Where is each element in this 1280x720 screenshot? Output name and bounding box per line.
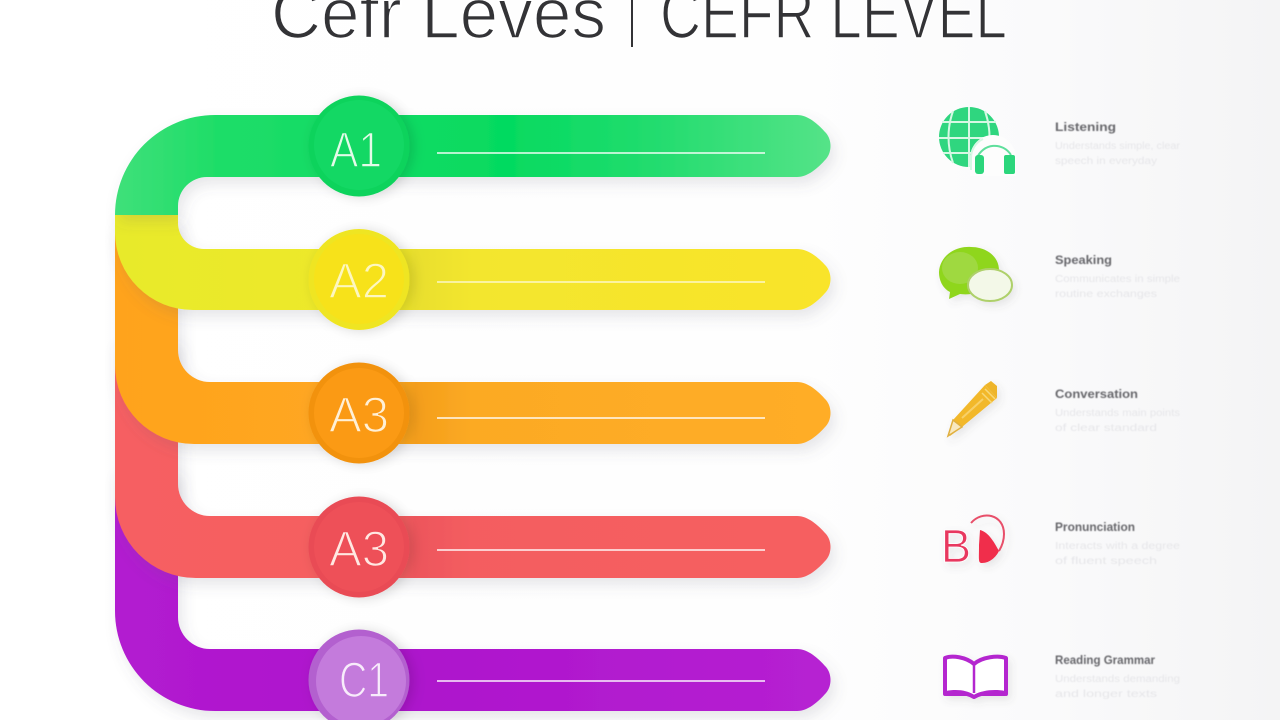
line: A3 [437, 417, 765, 419]
text block: listening: speech in everyday [1055, 156, 1157, 167]
icon: pencil [948, 381, 997, 436]
ribbon: A2 yellow [115, 215, 830, 310]
icon: globe and headphones [939, 107, 1016, 176]
ribbon: C1 purple [115, 470, 830, 711]
icon: open book [945, 657, 1006, 697]
icon: speech bubbles [939, 247, 1012, 301]
line: A3 red [437, 549, 765, 551]
text block: speaking [1055, 253, 1180, 300]
text block: conversation: Conversation [1055, 387, 1138, 401]
text block: pronunciation: Interacts with a degree [1055, 541, 1181, 552]
badge: C1 [308, 630, 410, 720]
level ribbons [115, 115, 830, 711]
text block: speaking: Speaking [1055, 253, 1112, 267]
text block: conversation [1055, 387, 1180, 434]
badge: A1 [308, 96, 410, 196]
badge: A3 [308, 362, 410, 464]
badge: A2: A2 [329, 253, 389, 309]
text block: listening [1055, 120, 1181, 167]
text block: pronunciation: Pronunciation [1055, 520, 1135, 534]
badge: C1: C1 [339, 652, 389, 708]
text block: reading and grammar: Understands demanding [1055, 674, 1180, 685]
title [271, 0, 1007, 54]
line: A1 [437, 152, 765, 154]
text block: pronunciation [1055, 520, 1181, 567]
badge: A1: A1 [330, 122, 382, 178]
text block: listening: Understands simple, clear [1055, 141, 1181, 152]
text block: pronunciation: of fluent speech [1055, 556, 1157, 567]
badge: A2 [308, 229, 410, 330]
line: C1 [437, 680, 765, 682]
text block: reading and grammar: Reading Grammar [1055, 653, 1155, 667]
icon: letter B with headphone: B [941, 520, 971, 572]
text block: conversation: of clear standard [1055, 423, 1157, 434]
text block: conversation: Understands main points [1055, 408, 1180, 419]
text block: speaking: Communicates in simple [1055, 274, 1180, 285]
ribbon: A3 red [115, 340, 830, 578]
text block: reading and grammar: and longer texts [1055, 689, 1157, 700]
text block: listening: Listening [1055, 120, 1116, 134]
icon: letter B with headphone [941, 515, 1004, 572]
line: A2 [437, 281, 765, 283]
text block: speaking: routine exchanges [1055, 289, 1157, 300]
ribbon: A1 green [115, 115, 830, 215]
badge: A3: A3 [329, 387, 389, 443]
ribbon: A3 orange [115, 225, 830, 444]
text block: reading and grammar [1055, 653, 1180, 700]
badge: A3 red [308, 496, 410, 598]
badge: A3 red: A3 [329, 521, 389, 577]
